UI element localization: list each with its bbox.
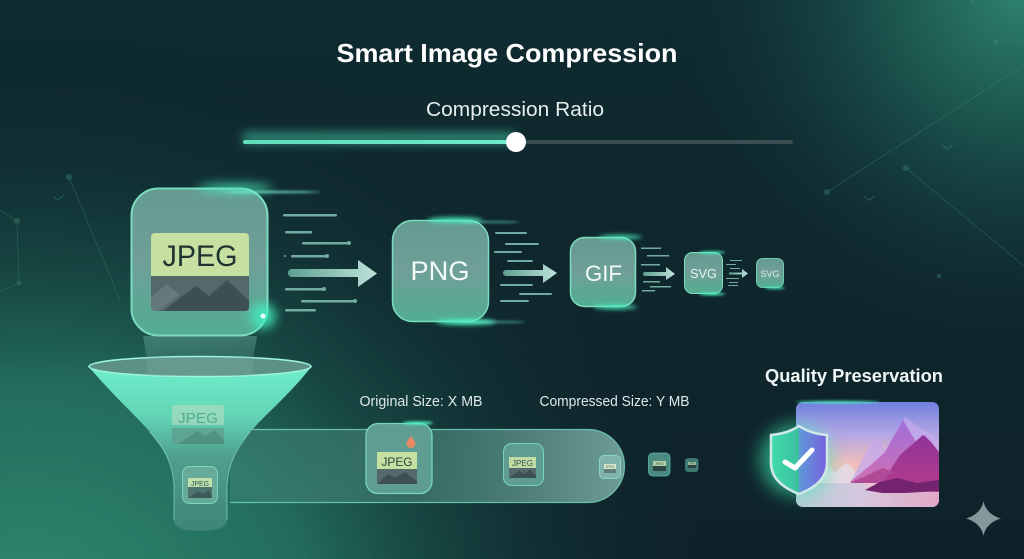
pipe tile: JPEG small: JPEG [606, 465, 615, 469]
size label: compressed: Compressed Size: Y MB [540, 394, 690, 410]
file tile: SVG small [756, 258, 785, 289]
arrow: SVG to SVG [729, 269, 748, 278]
sparkle star [966, 501, 1001, 536]
speed lines: JPEG [283, 214, 357, 312]
file tile: SVG large [684, 251, 725, 296]
pink ridge [850, 468, 893, 483]
funnel back glow column [143, 336, 257, 376]
JPEG image thumbnail: JPEG [162, 240, 238, 273]
file tile: JPEG [132, 184, 320, 336]
pipe tile: JPEG medium [504, 444, 544, 486]
speed lines: SVG [726, 260, 742, 286]
background network lines [0, 0, 1024, 300]
compression ratio slider [243, 132, 793, 152]
main purple mountain [850, 420, 939, 484]
output tile: JPEG smallest: JPEG [689, 462, 695, 466]
foreground shore [865, 478, 939, 493]
file tile: SVG small: SVG [760, 269, 780, 280]
heading: quality preservation: Quality Preservation [765, 366, 943, 386]
orange drop [406, 436, 416, 448]
JPEG ghost in funnel: JPEG [178, 410, 218, 427]
pipe tile: JPEG medium: JPEG [512, 459, 533, 468]
shield with check [760, 424, 832, 496]
output tile: JPEG tiny: JPEG [655, 462, 664, 466]
JPEG mini tile in neck [182, 466, 218, 504]
slider label: Compression Ratio [426, 99, 604, 121]
pipe tile: JPEG small [600, 456, 620, 478]
funnel [89, 356, 311, 531]
size label: original: Original Size: X MB [360, 394, 482, 410]
file tile: PNG [392, 217, 526, 325]
pipe [230, 430, 624, 502]
title: Smart Image Compression [336, 38, 678, 68]
file tile: PNG: PNG [410, 256, 470, 286]
funnel rim [89, 356, 311, 376]
JPEG image thumbnail [151, 233, 249, 311]
JPEG ghost in funnel [172, 405, 224, 444]
landscape image [796, 401, 939, 507]
far peaks [818, 463, 860, 483]
arrow: JPEG to PNG [288, 260, 377, 287]
output tile: JPEG smallest [686, 458, 698, 472]
JPEG mini tile in neck: JPEG [191, 481, 209, 488]
arrow: GIF to SVG [643, 267, 675, 280]
file tile: SVG large: SVG [690, 266, 717, 281]
file tile: GIF: GIF [585, 261, 622, 286]
dark magenta mountain [867, 435, 939, 492]
pipe tile: JPEG original: JPEG [382, 455, 412, 469]
output tile: JPEG tiny [648, 453, 670, 476]
speed lines: PNG [494, 232, 552, 302]
file tile: GIF [570, 235, 642, 309]
arrow: PNG to GIF [503, 264, 557, 283]
pipe tile: JPEG original [366, 421, 433, 494]
water [796, 483, 939, 507]
speed lines: GIF [641, 248, 671, 292]
